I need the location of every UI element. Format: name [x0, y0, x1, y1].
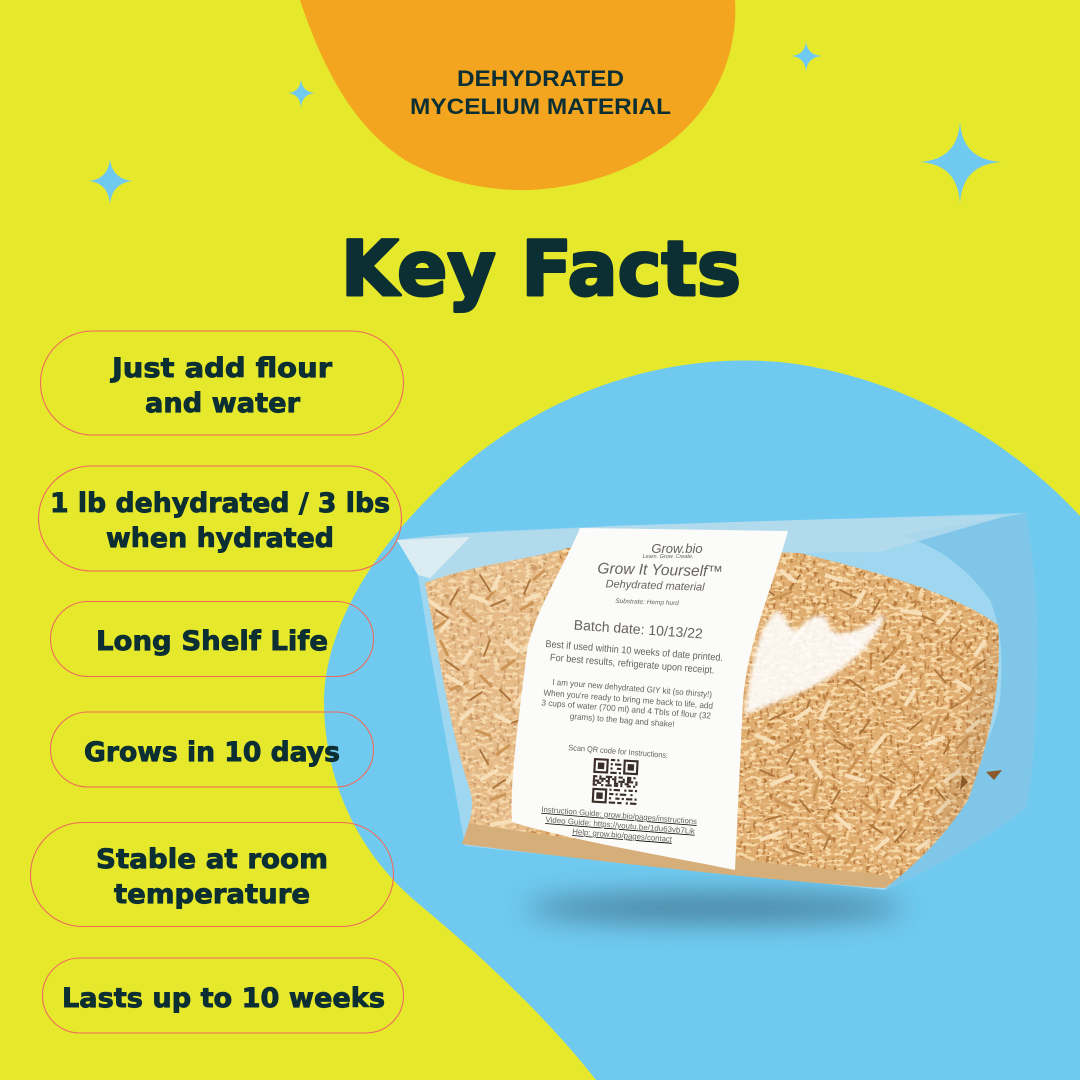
fact: just add flour and water [40, 331, 404, 435]
fact: long shelf life: Long Shelf Life [96, 626, 328, 657]
fact: just add flour and water: and water [145, 388, 301, 419]
fact: long shelf life [50, 602, 374, 676]
icon: sparkle left [89, 159, 133, 204]
fact: weight [38, 466, 402, 571]
fact: stable at room temperature [30, 822, 394, 926]
label links [541, 805, 697, 844]
label logo [642, 541, 703, 560]
label body text: I am your new dehydrated GIY kit (so thirsty!) [552, 677, 713, 699]
paler left chips area [420, 545, 560, 845]
label body text: For best results, refrigerate upon receipt. [550, 653, 715, 676]
plastic bag [397, 513, 1037, 890]
fact: stable at room temperature: Stable at room [96, 844, 328, 875]
label heading: Grow It Yourself™ [597, 560, 723, 581]
spots on plastic [960, 770, 1002, 790]
dark chip strokes [436, 575, 985, 854]
label body text [541, 639, 723, 760]
blue background blob [324, 361, 1080, 1080]
fact: lasts up to 10 weeks [42, 958, 404, 1033]
fact: lasts up to 10 weeks: Lasts up to 10 weeks [62, 983, 385, 1014]
label heading: Dehydrated material [605, 578, 705, 594]
label logo: Learn. Grow. Create. [642, 554, 694, 560]
wood chips [410, 540, 1010, 900]
fact: weight: when hydrated [106, 523, 334, 554]
mid chip strokes [432, 570, 975, 864]
icon: sparkle top left small [288, 79, 315, 108]
label links: Help: grow.bio/pages/contact [572, 827, 673, 844]
fact: just add flour and water: Just add flour [110, 353, 333, 384]
label body text: grams) to the bag and shake! [570, 711, 675, 729]
label heading [597, 560, 723, 607]
label body text: 3 cups of water (700 ml) and 4 Tbls of flour (32 [541, 697, 712, 721]
header text: MYCELIUM MATERIAL [410, 94, 671, 119]
label body text: When you're ready to bring me back to life, add [543, 687, 714, 711]
bag shadow [525, 894, 905, 922]
batch date: Batch date: 10/13/22 [573, 617, 704, 642]
fact: stable at room temperature: temperature [114, 879, 310, 910]
label links: Video Guide: https://youtu.be/1du63vb7Lik [545, 815, 696, 836]
label heading: Substrate: Hemp hurd [615, 598, 679, 607]
title: Key Facts [341, 224, 741, 313]
fact: grows in 10 days [50, 712, 374, 787]
label [512, 528, 788, 870]
header text [410, 66, 671, 119]
header text: DEHYDRATED [457, 66, 624, 91]
sandy bottom band [462, 823, 890, 888]
panel: fact pills [30, 331, 404, 1033]
label links: Instruction Guide: grow.bio/pages/instructions [541, 805, 697, 826]
product photo: bag of mycelium material [397, 513, 1037, 900]
label logo: Grow.bio [651, 541, 703, 556]
side shading [928, 638, 998, 844]
icon: sparkle right large [919, 121, 1002, 204]
icon: sparkle top right small [791, 41, 822, 72]
white plastic glare [745, 611, 885, 715]
label body text: Scan QR code for Instructions: [568, 743, 668, 760]
orange header blob [300, 0, 735, 190]
label body text: Best if used within 10 weeks of date printed. [545, 639, 723, 664]
fact: weight: 1 lb dehydrated / 3 lbs [50, 488, 390, 519]
fact: grows in 10 days: Grows in 10 days [84, 737, 340, 768]
pale chip strokes [428, 570, 985, 872]
QR code [592, 759, 639, 804]
